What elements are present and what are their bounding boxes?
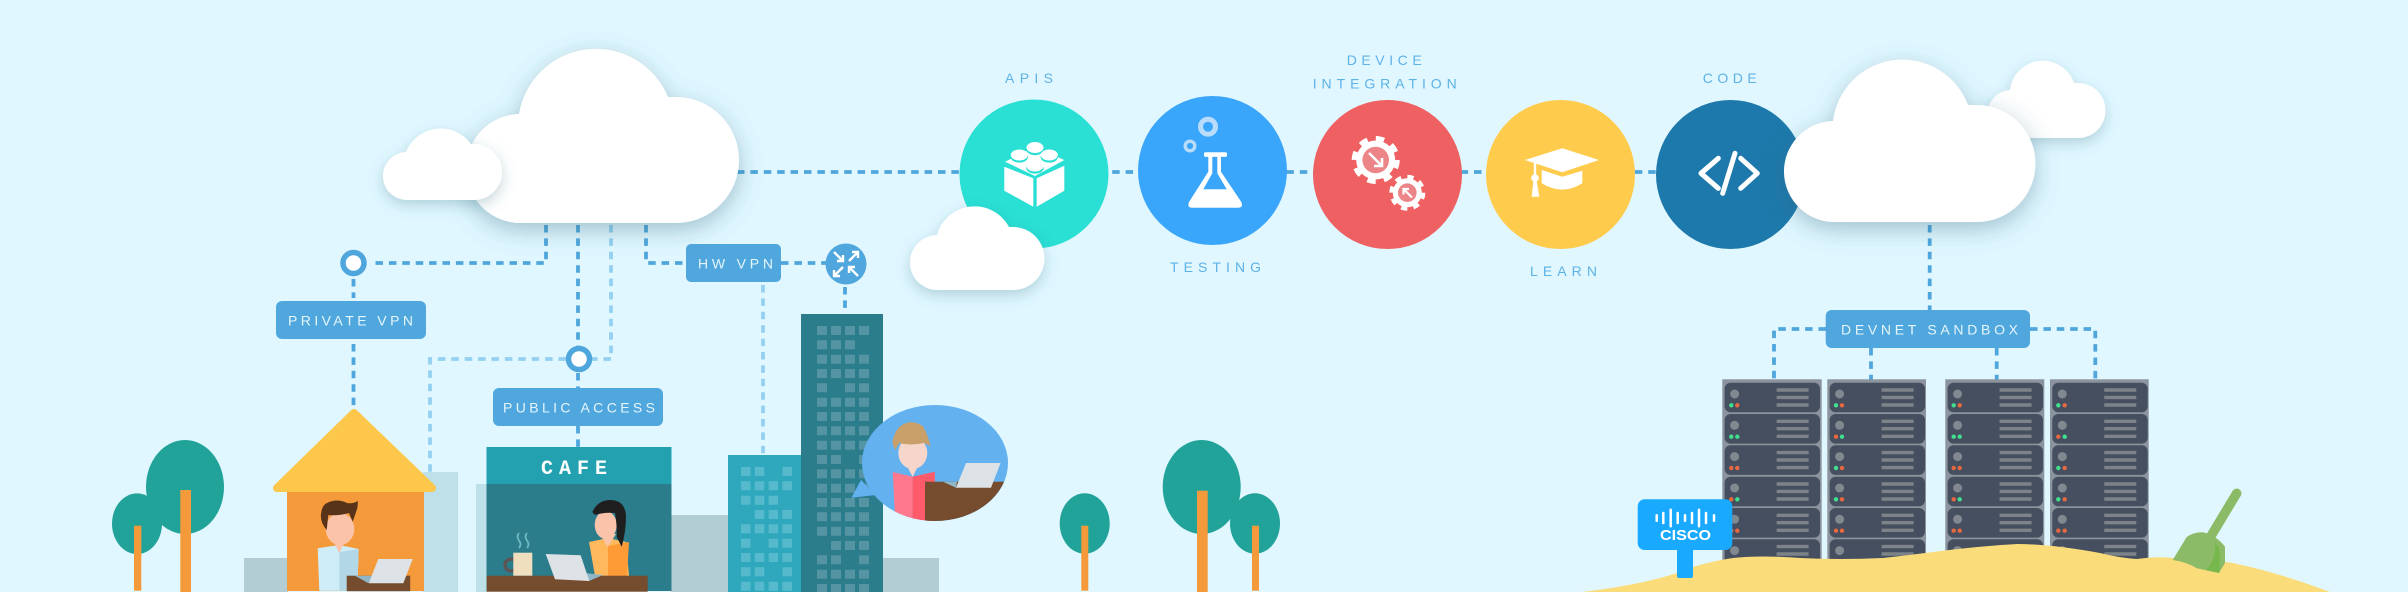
trees middle: [1060, 440, 1280, 593]
service circle: learn: [1486, 100, 1635, 249]
heading: code: CODE: [1703, 70, 1757, 86]
service circle: code: [1656, 100, 1805, 249]
ground edge strip: [0, 592, 2408, 596]
red status LEDs: [1731, 405, 2065, 531]
sand mound: [1582, 544, 2330, 592]
heading: device integration: [1313, 52, 1457, 92]
speech bubble with remote worker: [851, 405, 1010, 524]
server rack 3: [1945, 379, 2044, 596]
public access node: [568, 348, 590, 370]
private VPN label: [276, 301, 426, 339]
server rack 1: [1722, 379, 1822, 596]
icon: shovel: [2173, 493, 2237, 573]
server rack 4: [2050, 379, 2149, 596]
service circle: testing: [1138, 96, 1287, 245]
public access label: [493, 388, 663, 426]
cloud: sandbox cloud: [1784, 60, 2036, 222]
DevNet Sandbox label: [1826, 310, 2030, 348]
icon: graduation cap: [1525, 148, 1599, 197]
icon: gears: [1354, 138, 1423, 209]
short office building: [728, 455, 801, 592]
icon: router: [826, 244, 866, 284]
DevNet Sandbox label: DEVNET SANDBOX: [1841, 322, 2019, 338]
service circle: device integration: [1313, 100, 1462, 249]
house with man: [277, 413, 432, 591]
icon: flask: [1185, 119, 1242, 208]
service circle: APIs: [960, 100, 1108, 248]
heading: device integration: DEVICE: [1347, 52, 1422, 68]
cloud: below APIs circle: [910, 206, 1044, 290]
trees left: [112, 440, 224, 592]
Cisco logo bars: [1657, 510, 1714, 526]
Cisco sign: [1638, 499, 1732, 578]
cloud: small left: [383, 129, 502, 200]
icon: code brackets: [1701, 153, 1757, 193]
private VPN node: [343, 252, 364, 274]
server racks: [1722, 379, 2149, 596]
icon: building block: [1004, 142, 1064, 207]
heading: learn: LEARN: [1530, 263, 1597, 279]
server rack 2: [1827, 379, 1926, 596]
HW VPN label: HW VPN: [698, 256, 773, 272]
HW VPN label: [686, 244, 781, 282]
tall office building: [801, 314, 883, 592]
green status LEDs: [1731, 405, 2065, 499]
cloud: main internet cloud: [466, 49, 739, 223]
cloud: small right: [1987, 61, 2106, 138]
main dashed line through the service circles: [737, 170, 1790, 174]
Cisco wordmark: CISCO: [1660, 527, 1711, 544]
background skyline blocks: [244, 472, 939, 592]
heading: APIs: APIS: [1005, 70, 1053, 86]
cafe sign text: CAFE: [541, 458, 613, 481]
heading: device integration: INTEGRATION: [1313, 76, 1457, 92]
connector lines: cloud to locations: [354, 225, 845, 472]
private VPN label: PRIVATE VPN: [288, 312, 413, 328]
public access label: PUBLIC ACCESS: [503, 400, 655, 416]
cafe interior: desk, mug and woman: [487, 500, 648, 592]
cafe with woman: [486, 447, 672, 591]
connector lines: sandbox to racks: [1774, 225, 2095, 380]
heading: testing: TESTING: [1170, 259, 1261, 275]
